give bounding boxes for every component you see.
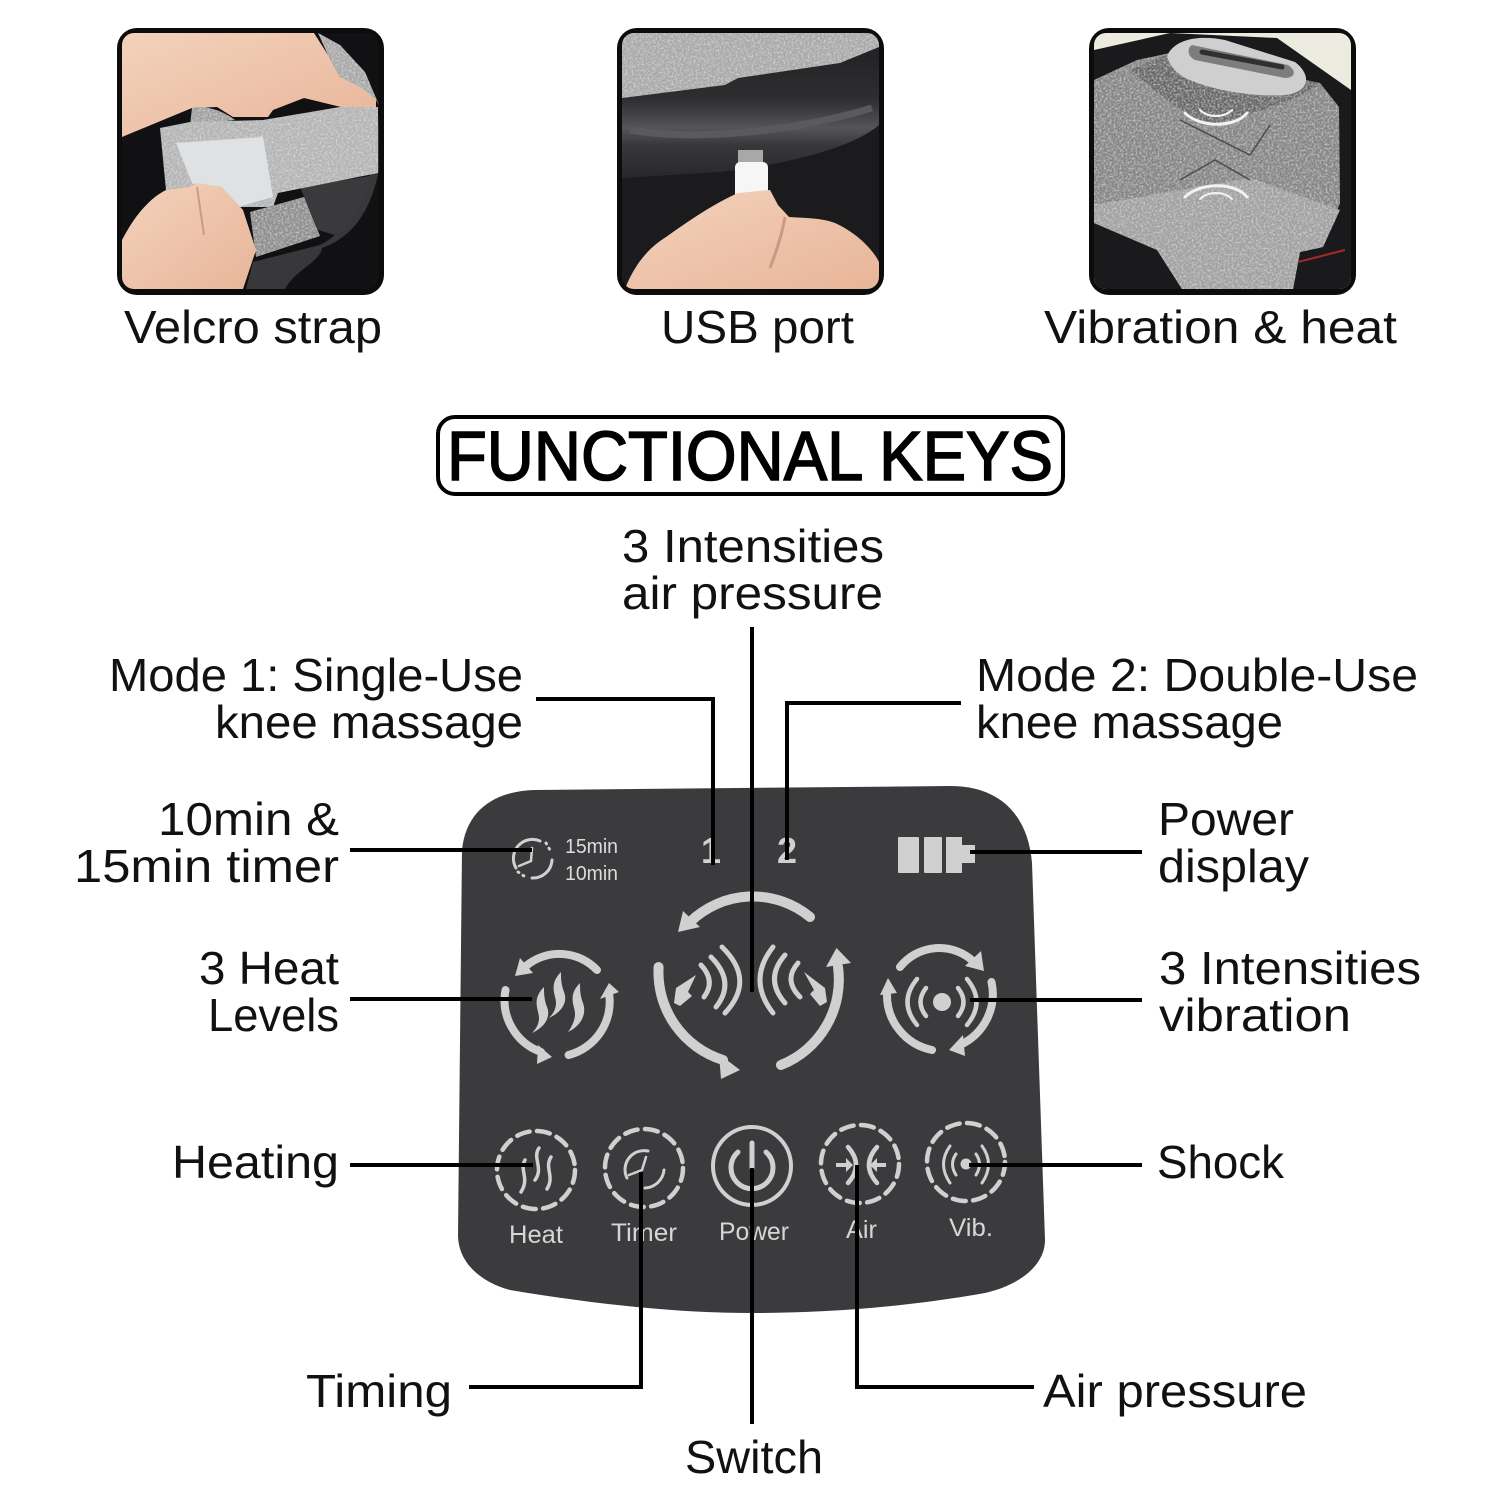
leader: power display bbox=[970, 850, 1142, 854]
text: 15min: 15min bbox=[565, 836, 618, 858]
label: 3 intensities air pressure bbox=[622, 520, 884, 619]
label: mode 1: knee massage bbox=[215, 696, 523, 748]
leader: timing bbox=[469, 1172, 641, 1387]
photo: velcro strap bbox=[117, 28, 384, 295]
leader: heat levels bbox=[350, 997, 532, 1001]
key: heat: Heat bbox=[509, 1221, 563, 1249]
label: heat levels: Levels bbox=[208, 989, 339, 1041]
label: mode 2 bbox=[976, 649, 1418, 748]
label: 3 intensities air pressure: 3 Intensities bbox=[622, 520, 884, 572]
key: power: Power bbox=[719, 1218, 789, 1246]
key: vibration: Vib. bbox=[949, 1214, 993, 1242]
label: heat levels bbox=[199, 942, 339, 1041]
caption: vibration and heat: Vibration & heat bbox=[1044, 301, 1397, 353]
label: vibration intensities: 3 Intensities bbox=[1159, 942, 1421, 994]
label: shock: Shock bbox=[1157, 1136, 1285, 1188]
icon: vibration dial bbox=[880, 948, 993, 1056]
mode number 1: 1 bbox=[701, 830, 721, 871]
label: vibration intensities bbox=[1159, 942, 1421, 1041]
caption: velcro strap: Velcro strap bbox=[124, 301, 382, 353]
photo: usb port bbox=[617, 28, 884, 295]
key: air: Air bbox=[846, 1216, 877, 1244]
label: timer options bbox=[74, 793, 339, 892]
label: mode 1 bbox=[109, 649, 523, 748]
label: timer options: 15min timer bbox=[74, 840, 339, 892]
icon: timer clock bbox=[513, 839, 552, 878]
label: heating: Heating bbox=[172, 1136, 339, 1188]
label: mode 2: knee massage bbox=[976, 696, 1283, 748]
key: power bbox=[713, 1127, 791, 1246]
photo: vibration and heat bbox=[1089, 28, 1356, 295]
icon: air pressure dial bbox=[658, 896, 851, 1079]
key: air bbox=[821, 1125, 899, 1244]
mode number 2: 2 bbox=[777, 830, 797, 871]
key: vibration bbox=[927, 1123, 1005, 1242]
label: power display: Power bbox=[1158, 793, 1294, 845]
leader: mode 2 bbox=[787, 703, 961, 860]
label: timing: Timing bbox=[306, 1365, 452, 1417]
label: mode 2: Mode 2: Double-Use bbox=[976, 649, 1418, 701]
label: power display bbox=[1158, 793, 1309, 892]
title: functional keys: FUNCTIONAL KEYS bbox=[447, 417, 1053, 495]
leader: vibration intensities bbox=[970, 998, 1142, 1002]
key: timer bbox=[605, 1129, 683, 1247]
label: switch: Switch bbox=[685, 1431, 823, 1483]
text: 10min: 10min bbox=[565, 863, 618, 885]
leader: mode 1 bbox=[536, 699, 713, 865]
icon: heat levels dial bbox=[505, 954, 619, 1064]
leader: timer options bbox=[350, 848, 532, 852]
leader: switch bbox=[750, 1168, 754, 1424]
caption: usb port: USB port bbox=[661, 301, 854, 353]
icon: battery bbox=[898, 837, 975, 873]
label: power display: display bbox=[1158, 840, 1309, 892]
label: timer options: 10min & bbox=[158, 793, 339, 845]
key: timer: Timer bbox=[611, 1219, 677, 1247]
label: heat levels: 3 Heat bbox=[199, 942, 339, 994]
label: 3 intensities air pressure: air pressure bbox=[622, 567, 883, 619]
leader: air pressure intensities bbox=[750, 627, 754, 992]
key: heat bbox=[497, 1131, 575, 1249]
panel: control panel bbox=[458, 786, 1045, 1313]
leader: heating bbox=[350, 1163, 533, 1167]
label: mode 1: Mode 1: Single-Use bbox=[109, 649, 523, 701]
leader: air pressure bbox=[857, 1165, 1034, 1387]
label: air pressure: Air pressure bbox=[1043, 1365, 1307, 1417]
leader: shock bbox=[969, 1163, 1142, 1167]
label: vibration intensities: vibration bbox=[1159, 989, 1351, 1041]
